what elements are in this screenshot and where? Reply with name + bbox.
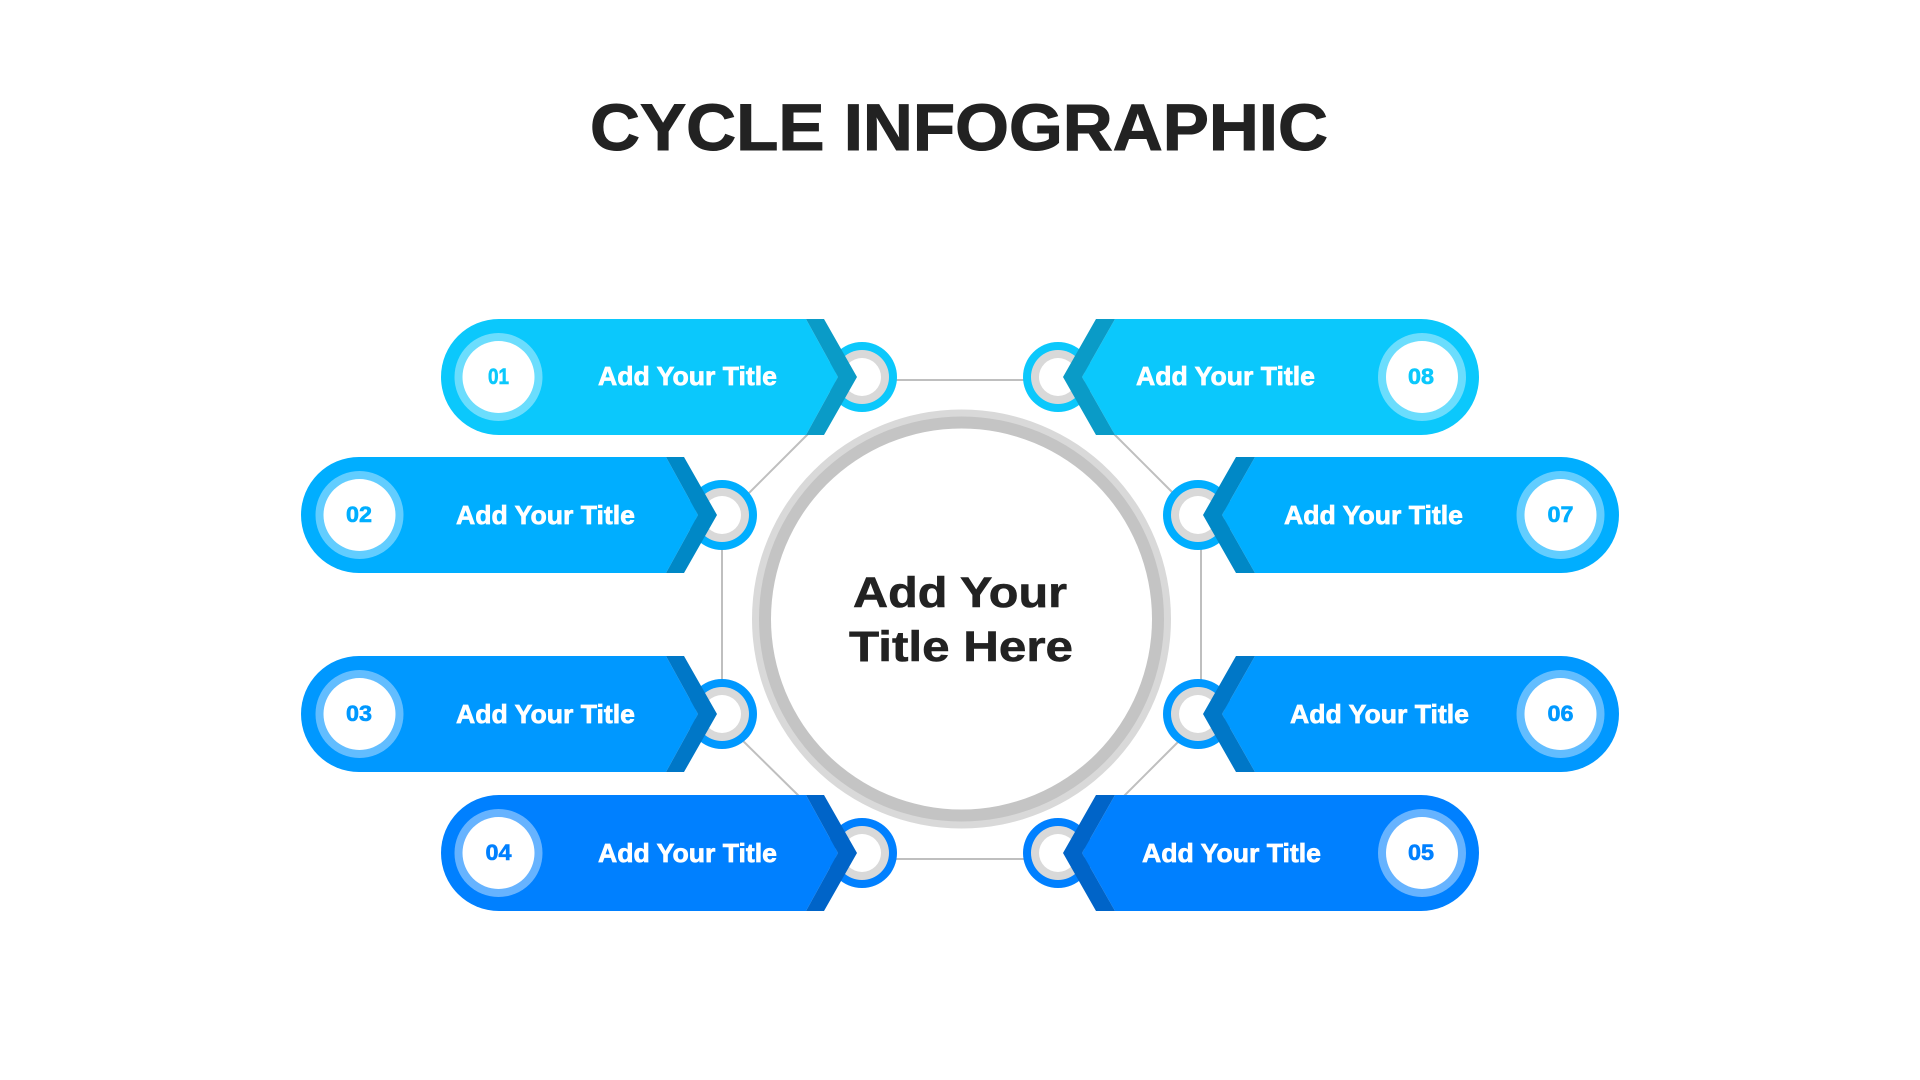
step 06: 06 [1548,701,1574,726]
connector lines [722,380,1201,859]
step 08: 08 [1408,364,1434,389]
step 02: Add Your Title [456,500,635,530]
step 05 [1023,795,1479,911]
centre circle [752,410,1171,828]
centre title: Add Your [853,569,1067,617]
step 03: 03 [346,701,372,726]
step 05: 05 [1408,840,1434,865]
step 06: Add Your Title [1290,699,1469,729]
step 08: Add Your Title [1136,361,1315,391]
title: CYCLE INFOGRAPHIC [590,90,1328,164]
step 06 [1163,656,1619,772]
step 04: 04 [486,840,512,865]
step 07: Add Your Title [1284,500,1463,530]
step 01: 01 [488,364,509,389]
centre title: Title Here [849,623,1073,671]
step 03 [301,656,757,772]
step 04 [441,795,897,911]
step 07: 07 [1548,502,1574,527]
step 02 [301,457,757,573]
step 01: Add Your Title [598,361,777,391]
step 04: Add Your Title [598,838,777,868]
step 01 [441,319,897,435]
step 02: 02 [346,502,372,527]
step 08 [1023,319,1479,435]
step 07 [1163,457,1619,573]
step 03: Add Your Title [456,699,635,729]
step 05: Add Your Title [1142,838,1321,868]
